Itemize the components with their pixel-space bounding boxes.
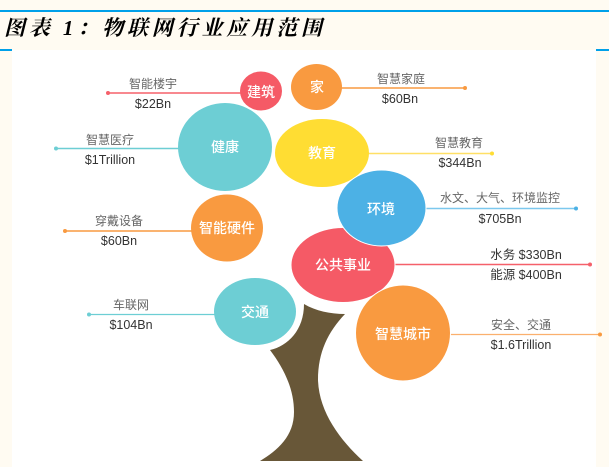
bubble: education — [275, 119, 369, 187]
bubble: health: 健康 — [211, 139, 239, 155]
title: 图表 1：物联网行业应用范围 — [4, 16, 325, 40]
bubble: smart city: 智慧城市 — [375, 326, 431, 342]
bubble: transport — [214, 278, 296, 345]
branch: smart building: $22Bn — [135, 97, 171, 111]
bubble: building — [240, 72, 282, 110]
branch: education — [365, 135, 494, 170]
bubble: home — [291, 64, 342, 110]
branch: wearables: 穿戴设备 — [95, 213, 143, 228]
tree trunk — [260, 304, 363, 461]
branch: healthcare: 智慧医疗 — [86, 132, 134, 147]
bubble: environment: 环境 — [367, 201, 395, 217]
bubble: health — [178, 103, 272, 191]
bubble: smart city — [356, 285, 450, 381]
branch: utilities: 水务 $330Bn — [490, 247, 562, 262]
bubble: education: 教育 — [308, 145, 336, 161]
branch: smart city: 安全、交通 — [491, 317, 551, 332]
bubble: home: 家 — [310, 79, 324, 95]
branch: connected cars — [87, 297, 218, 332]
branch: smart home: $60Bn — [382, 92, 418, 106]
branch: environment: 水文、大气、环境监控 — [440, 190, 560, 205]
branch: smart building — [106, 76, 245, 111]
branch: education: $344Bn — [438, 156, 482, 170]
branch: environment — [424, 190, 578, 226]
bubble: environment — [337, 170, 426, 246]
bubble: smart hardware: 智能硬件 — [199, 220, 255, 236]
branch: education: 智慧教育 — [435, 135, 483, 150]
branch: smart building: 智能楼宇 — [129, 76, 177, 91]
branch: wearables: $60Bn — [101, 234, 137, 248]
bubble: building: 建筑 — [247, 84, 275, 100]
branch: environment: $705Bn — [478, 212, 522, 226]
branch: connected cars: $104Bn — [109, 318, 153, 332]
bubble: smart hardware — [191, 194, 263, 262]
branch: wearables — [63, 213, 195, 248]
branch: utilities — [392, 247, 592, 282]
branch: connected cars: 车联网 — [113, 297, 149, 312]
branch: utilities: 能源 $400Bn — [490, 268, 562, 282]
bubble: utilities: 公共事业 — [315, 257, 371, 273]
bubble: utilities — [291, 228, 395, 302]
branch: healthcare: $1Trillion — [85, 153, 135, 167]
branch: smart home — [340, 71, 467, 106]
bubble: transport: 交通 — [241, 304, 269, 320]
branch: smart city: $1.6Trillion — [491, 338, 551, 352]
branch: smart city — [448, 317, 602, 352]
branch: healthcare — [54, 132, 182, 167]
branch: smart home: 智慧家庭 — [377, 71, 425, 86]
